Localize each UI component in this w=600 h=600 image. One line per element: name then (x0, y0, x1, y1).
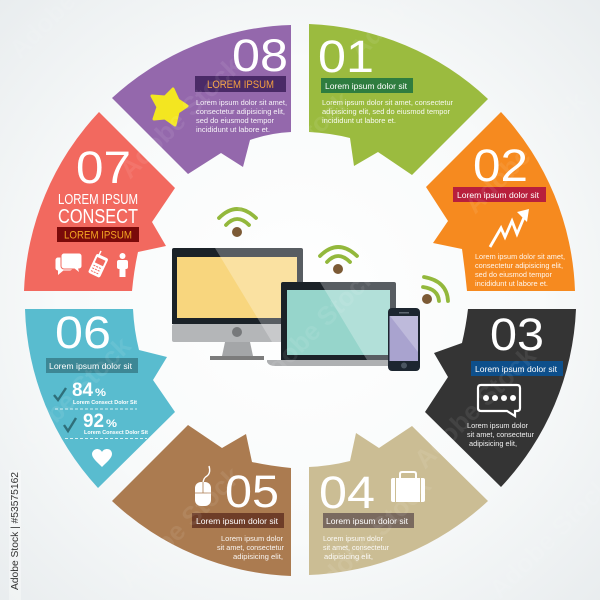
panel: segment 01 (309, 24, 488, 175)
number 06: 06 (55, 307, 111, 358)
panel: segment 07 (24, 112, 175, 291)
number 08: 08 (232, 30, 288, 81)
label bar 08 (195, 76, 286, 92)
label bar 03: Lorem ipsum dolor sit (475, 364, 558, 374)
watermarks: Adobe Stock (113, 50, 247, 184)
label bar 05: Lorem ipsum dolor sit (196, 516, 279, 526)
device: laptop (267, 282, 396, 366)
watermarks: Adobe Stock (458, 85, 592, 219)
label bar 04 (323, 513, 414, 528)
stat 84%: Lorem Consect Dolor Sit (73, 400, 137, 406)
number 03: 03 (490, 309, 544, 360)
panel: segment 02 (426, 112, 575, 291)
device: smartphone (388, 308, 420, 371)
body text 02: consectetur adipisicing elit, (475, 261, 563, 270)
body text 03: sit amet, consectetur (467, 430, 535, 439)
body text 08: incididunt ut labore et. (196, 125, 270, 134)
body text 02: incididunt ut labore et. (475, 279, 548, 288)
body text 04: Lorem ipsum dolor (323, 534, 384, 543)
body text 02: Lorem ipsum dolor sit amet, (475, 252, 565, 261)
icon: wifi signal above monitor (219, 209, 256, 237)
icon: mobile phone (88, 250, 110, 278)
icon: person (117, 253, 128, 277)
heading CONSECT: CONSECT (58, 206, 138, 228)
icon: chat bubbles (55, 253, 82, 275)
body text 01 (322, 98, 454, 125)
body text 08: Lorem ipsum dolor sit amet, (196, 98, 287, 107)
number 01: 01 (318, 31, 374, 82)
device: desktop monitor (172, 248, 303, 360)
number 04: 04 (319, 467, 375, 518)
body text 01: incididunt ut labore et. (322, 116, 396, 125)
label bar 06 (46, 358, 138, 373)
body text 05 (217, 534, 285, 561)
watermarks: Adobe Stock (223, 85, 357, 219)
body text 08: sed do eiusmod tempor (196, 116, 275, 125)
label bar 04: Lorem ipsum dolor sit (326, 516, 409, 526)
label bar 02 (453, 187, 546, 202)
watermarks: Adobe Stock (3, 330, 137, 464)
number 07: 07 (76, 142, 131, 193)
label bar 06: Lorem ipsum dolor sit (49, 361, 133, 371)
stat 84%: 84 (72, 380, 93, 401)
body text 04: adipisicing elit, (324, 552, 373, 561)
icon: wifi signal above laptop (320, 247, 357, 274)
body text 04 (323, 534, 390, 561)
body text 03 (467, 421, 535, 448)
label bar 01: Lorem ipsum dolor sit (325, 81, 408, 91)
panel: segment 08 (112, 25, 291, 174)
stat 84%: % (95, 387, 106, 399)
panel: segment 03 (425, 309, 576, 487)
body text 02: sed do eiusmod tempor (475, 270, 553, 279)
panel: segment 04 (309, 426, 488, 575)
panel: segment 06 (25, 307, 175, 488)
stat 92%: 92 (83, 411, 104, 432)
number 05: 05 (225, 466, 279, 517)
icon: briefcase (391, 472, 425, 502)
body text 08: consectetur adipisicing elit, (196, 107, 285, 116)
body text 01: adipisicing elit, sed do eiusmod tempor (322, 107, 451, 116)
icon: star (152, 89, 187, 125)
panel: segment 05 (112, 425, 291, 576)
body text 03: Lorem ipsum dolor (467, 421, 529, 430)
credit line: Adobe Stock | #53575162 (10, 472, 21, 590)
body text 05: sit amet, consectetur (217, 543, 285, 552)
label bar 05 (192, 513, 284, 528)
label bar 02: Lorem ipsum dolor sit (457, 190, 540, 200)
icon: heart (92, 449, 112, 467)
icon: wifi signal by phone (422, 277, 448, 304)
label bar 01 (321, 78, 413, 93)
watermarks: Adobe Stock (248, 260, 382, 394)
body text 02 (475, 252, 565, 288)
stat 92% (64, 411, 148, 436)
stat 84% (54, 380, 137, 406)
watermarks: Adobe Stock (408, 340, 542, 474)
stat 92%: % (106, 418, 117, 430)
body text 05: Lorem ipsum dolor (221, 534, 284, 543)
stat 92%: Lorem Consect Dolor Sit (84, 430, 148, 436)
icon: chat bubble with dots (478, 385, 520, 416)
heading LOREM IPSUM: LOREM IPSUM (58, 192, 138, 208)
icon: rising arrow (490, 209, 529, 247)
body text 04: sit amet, consectetur (323, 543, 390, 552)
label bar 08: LOREM IPSUM (207, 79, 274, 91)
number 02: 02 (473, 140, 528, 191)
watermarks: Adobe Stock (113, 460, 247, 594)
body text 03: adipisicing elit, (469, 439, 517, 448)
body text 05: adipisicing elit, (233, 552, 283, 561)
label bar 07: LOREM IPSUM (64, 230, 132, 242)
body text 01: Lorem ipsum dolor sit amet, consectetur (322, 98, 454, 107)
body text 08 (196, 98, 287, 134)
label bar 03 (471, 361, 563, 376)
icon: computer mouse (195, 466, 211, 506)
